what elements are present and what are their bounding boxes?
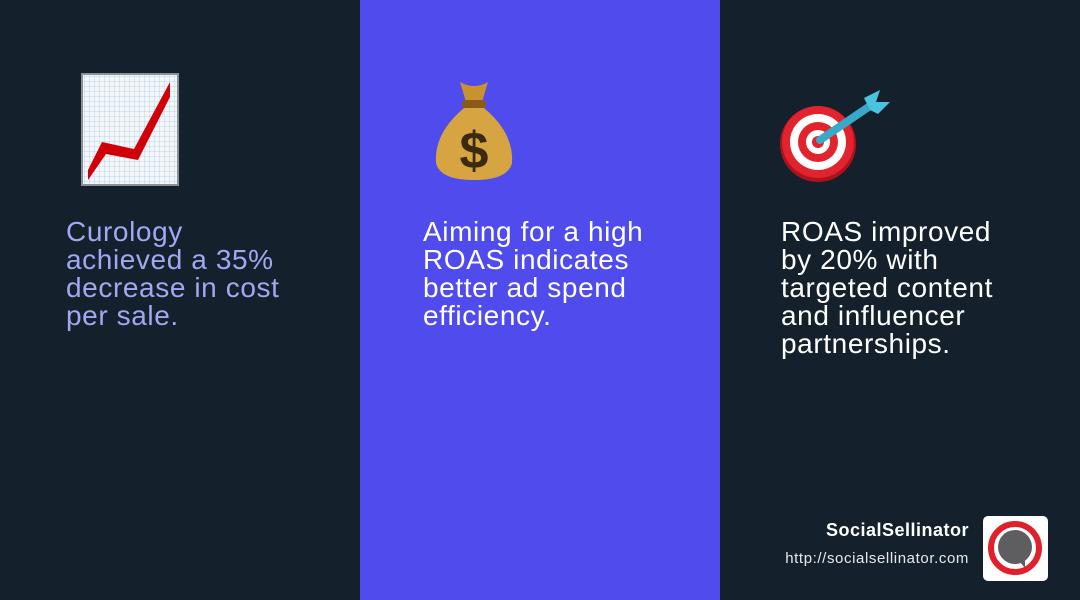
- text: middle stat: [423, 216, 643, 331]
- text: right stat: partnerships.: [781, 328, 951, 359]
- icon: money bag: [436, 82, 512, 180]
- text: middle stat: Aiming for a high: [423, 216, 643, 247]
- icon: target with dart: [780, 90, 890, 182]
- brand: name and url: [785, 520, 969, 567]
- text: left stat: per sale.: [66, 300, 179, 331]
- text: right stat: by 20% with: [781, 244, 939, 275]
- brand: name and url: SocialSellinator: [826, 520, 969, 540]
- text: left stat: [66, 216, 280, 331]
- text: middle stat: efficiency.: [423, 300, 552, 331]
- text: middle stat: better ad spend: [423, 272, 627, 303]
- icon: chart: [81, 73, 179, 186]
- text: right stat: ROAS improved: [781, 216, 991, 247]
- text: right stat: and influencer: [781, 300, 965, 331]
- text: middle stat: ROAS indicates: [423, 244, 629, 275]
- panel: middle: [360, 0, 720, 600]
- icon: money bag: $: [460, 122, 489, 180]
- text: left stat: achieved a 35%: [66, 244, 274, 275]
- text: left stat: Curology: [66, 216, 183, 247]
- logo: [983, 516, 1048, 581]
- panel: left: [0, 0, 360, 600]
- text: left stat: decrease in cost: [66, 272, 280, 303]
- text: right stat: [781, 216, 993, 359]
- panel: right: [720, 0, 1080, 600]
- brand: name and url: http://socialsellinator.com: [785, 550, 969, 567]
- text: right stat: targeted content: [781, 272, 993, 303]
